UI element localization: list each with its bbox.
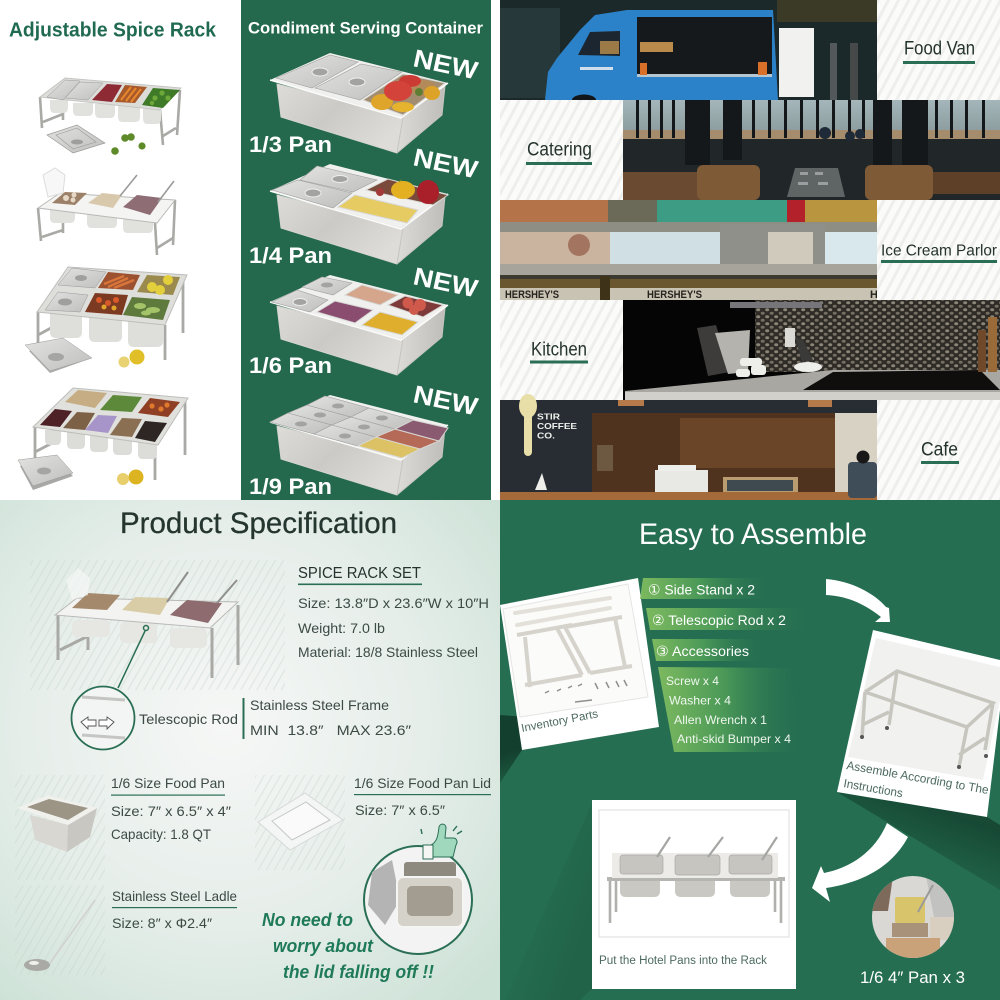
callout: no need to worry: worry about <box>273 936 374 956</box>
1/6 pan set <box>270 275 448 375</box>
new badges: NEW <box>411 262 481 303</box>
new badges: NEW <box>411 44 481 85</box>
food pan photo <box>17 795 97 852</box>
polaroid: inventory parts: Inventory Parts <box>520 708 599 735</box>
hershey's signage: H <box>870 289 878 301</box>
callout: no need to worry: No need to <box>262 910 353 930</box>
photo circle: 1/6 pan <box>872 876 954 958</box>
text: pan count: 1/6 4″ Pan x 3 <box>860 968 965 987</box>
stir coffee co sign: CO. <box>537 430 555 440</box>
text: telescopic rod: Telescopic Rod <box>139 711 238 727</box>
spec text: food pan: Capacity: 1.8 QT <box>111 826 211 842</box>
icon: spoon logo <box>519 394 537 456</box>
polaroid: assembly: Assemble According to The <box>845 758 990 797</box>
spec text: food pan lid: Size: 7″ x 6.5″ <box>355 802 445 818</box>
parts bar: accessories list: Washer x 4 <box>669 694 731 708</box>
spec text: spice rack set <box>298 565 489 660</box>
1/9 pan set <box>270 395 448 495</box>
new badges: NEW <box>411 380 481 421</box>
photo: cafe <box>500 394 877 500</box>
photo: kitchen <box>623 300 1000 400</box>
spec text: food pan <box>111 775 231 842</box>
panel: adjustable spice rack <box>0 0 241 500</box>
parts bar: accessories <box>652 639 765 661</box>
parts bar: accessories list: Allen Wrench x 1 <box>674 713 767 727</box>
label: cafe <box>877 400 1000 500</box>
rack with six pans <box>25 267 187 373</box>
polaroid: assembly: Instructions <box>842 776 904 800</box>
hershey's signage <box>505 289 878 301</box>
parts bar: side stand <box>640 578 770 599</box>
pan size labels: 1/6 Pan <box>249 353 332 378</box>
spice rack photo <box>55 568 238 678</box>
parts bar: accessories list: Anti-skid Bumper x 4 <box>677 732 791 746</box>
new badges <box>411 44 481 421</box>
heading: product specification: Product Specification <box>120 507 397 540</box>
label: catering <box>500 100 623 200</box>
clear lid photo <box>258 793 343 850</box>
spec text: food pan: Size: 7″ x 6.5″ x 4″ <box>111 803 231 819</box>
stir coffee co sign: COFFEE <box>537 421 577 431</box>
stir coffee co sign <box>537 412 577 440</box>
parts bar: side stand: ① Side Stand x 2 <box>648 582 755 598</box>
polaroid: assembly <box>837 630 1000 817</box>
label: ice cream parlor <box>877 200 1000 300</box>
spec text: ladle: Size: 8″ x Φ2.4″ <box>112 915 212 931</box>
arrow: to assembly <box>826 579 890 622</box>
spec text: spice rack set: Material: 18/8 Stainless Steel <box>298 644 478 660</box>
parts bar: accessories list <box>658 667 802 752</box>
photo: ice cream parlor <box>500 200 878 301</box>
detail circle: telescopic rod <box>72 686 134 750</box>
hershey's signage: HERSHEY'S <box>505 289 559 301</box>
polaroid: hotel pans: Put the Hotel Pans into the Rack <box>599 955 767 967</box>
polaroid: hotel pans <box>592 800 796 989</box>
parts bar: accessories: ③ Accessories <box>656 643 749 659</box>
text: stainless steel frame: Stainless Steel Frame <box>250 697 389 713</box>
heading: easy to assemble: Easy to Assemble <box>639 518 867 551</box>
stir coffee co sign: STIR <box>537 412 560 422</box>
ladle photo <box>24 900 95 971</box>
parts bar: telescopic rod <box>646 608 810 630</box>
panel: condiment serving container <box>241 0 491 500</box>
label: ice cream parlor: Ice Cream Parlor <box>881 242 998 260</box>
parts bar: accessories list: Screw x 4 <box>666 674 719 688</box>
hershey's signage: HERSHEY'S <box>647 289 702 301</box>
label: food van <box>877 0 1000 100</box>
spec text: food pan: 1/6 Size Food Pan <box>111 775 225 791</box>
pan size labels: 1/3 Pan <box>249 132 332 157</box>
label: cafe: Cafe <box>921 440 958 460</box>
spec text: spice rack set: Size: 13.8″D x 23.6″W x 10″H <box>298 595 489 611</box>
label: kitchen: Kitchen <box>531 340 587 360</box>
label: catering: Catering <box>527 140 592 160</box>
photo: catering <box>623 100 1000 200</box>
1/4 pan set <box>270 164 448 264</box>
pan size labels: 1/9 Pan <box>249 474 332 499</box>
panel: easy to assemble <box>500 500 1000 1000</box>
heading: condiment serving container: Condiment Serving Container <box>248 18 483 38</box>
spec text: ladle: Stainless Steel Ladle <box>112 888 237 904</box>
spec text: spice rack set: SPICE RACK SET <box>298 565 421 582</box>
spec text: spice rack set: Weight: 7.0 lb <box>298 620 385 636</box>
1/3 pan set <box>270 53 448 153</box>
callout: no need to worry: the lid falling off !! <box>283 962 434 982</box>
rack with eight pans <box>18 388 188 490</box>
arrow: to final rack <box>812 823 908 902</box>
pan size labels: 1/4 Pan <box>249 243 332 268</box>
photo: food van <box>500 0 877 100</box>
parts bar: telescopic rod: ② Telescopic Rod x 2 <box>652 612 786 628</box>
heading: adjustable spice rack: Adjustable Spice Rack <box>9 20 217 42</box>
label: kitchen <box>500 300 623 400</box>
label: food van: Food Van <box>904 38 975 60</box>
pointer line <box>118 626 148 688</box>
new badges: NEW <box>411 143 481 184</box>
spec text: food pan lid <box>354 775 491 818</box>
rack with three pans and ladles <box>38 168 175 255</box>
text: stainless steel frame <box>250 697 411 738</box>
polaroid: inventory parts <box>500 578 659 750</box>
callout: no need to worry <box>262 910 434 982</box>
spec text: food pan lid: 1/6 Size Food Pan Lid <box>354 775 491 791</box>
panel: product specification <box>0 500 500 1000</box>
detail circle: lid fit <box>364 846 472 954</box>
rack with five pans <box>40 78 181 155</box>
spec text: ladle <box>112 888 237 931</box>
icon: thumbs up <box>421 824 462 859</box>
pan size labels <box>249 132 332 499</box>
text: stainless steel frame: MIN 13.8″ MAX 23.6″ <box>250 722 411 738</box>
